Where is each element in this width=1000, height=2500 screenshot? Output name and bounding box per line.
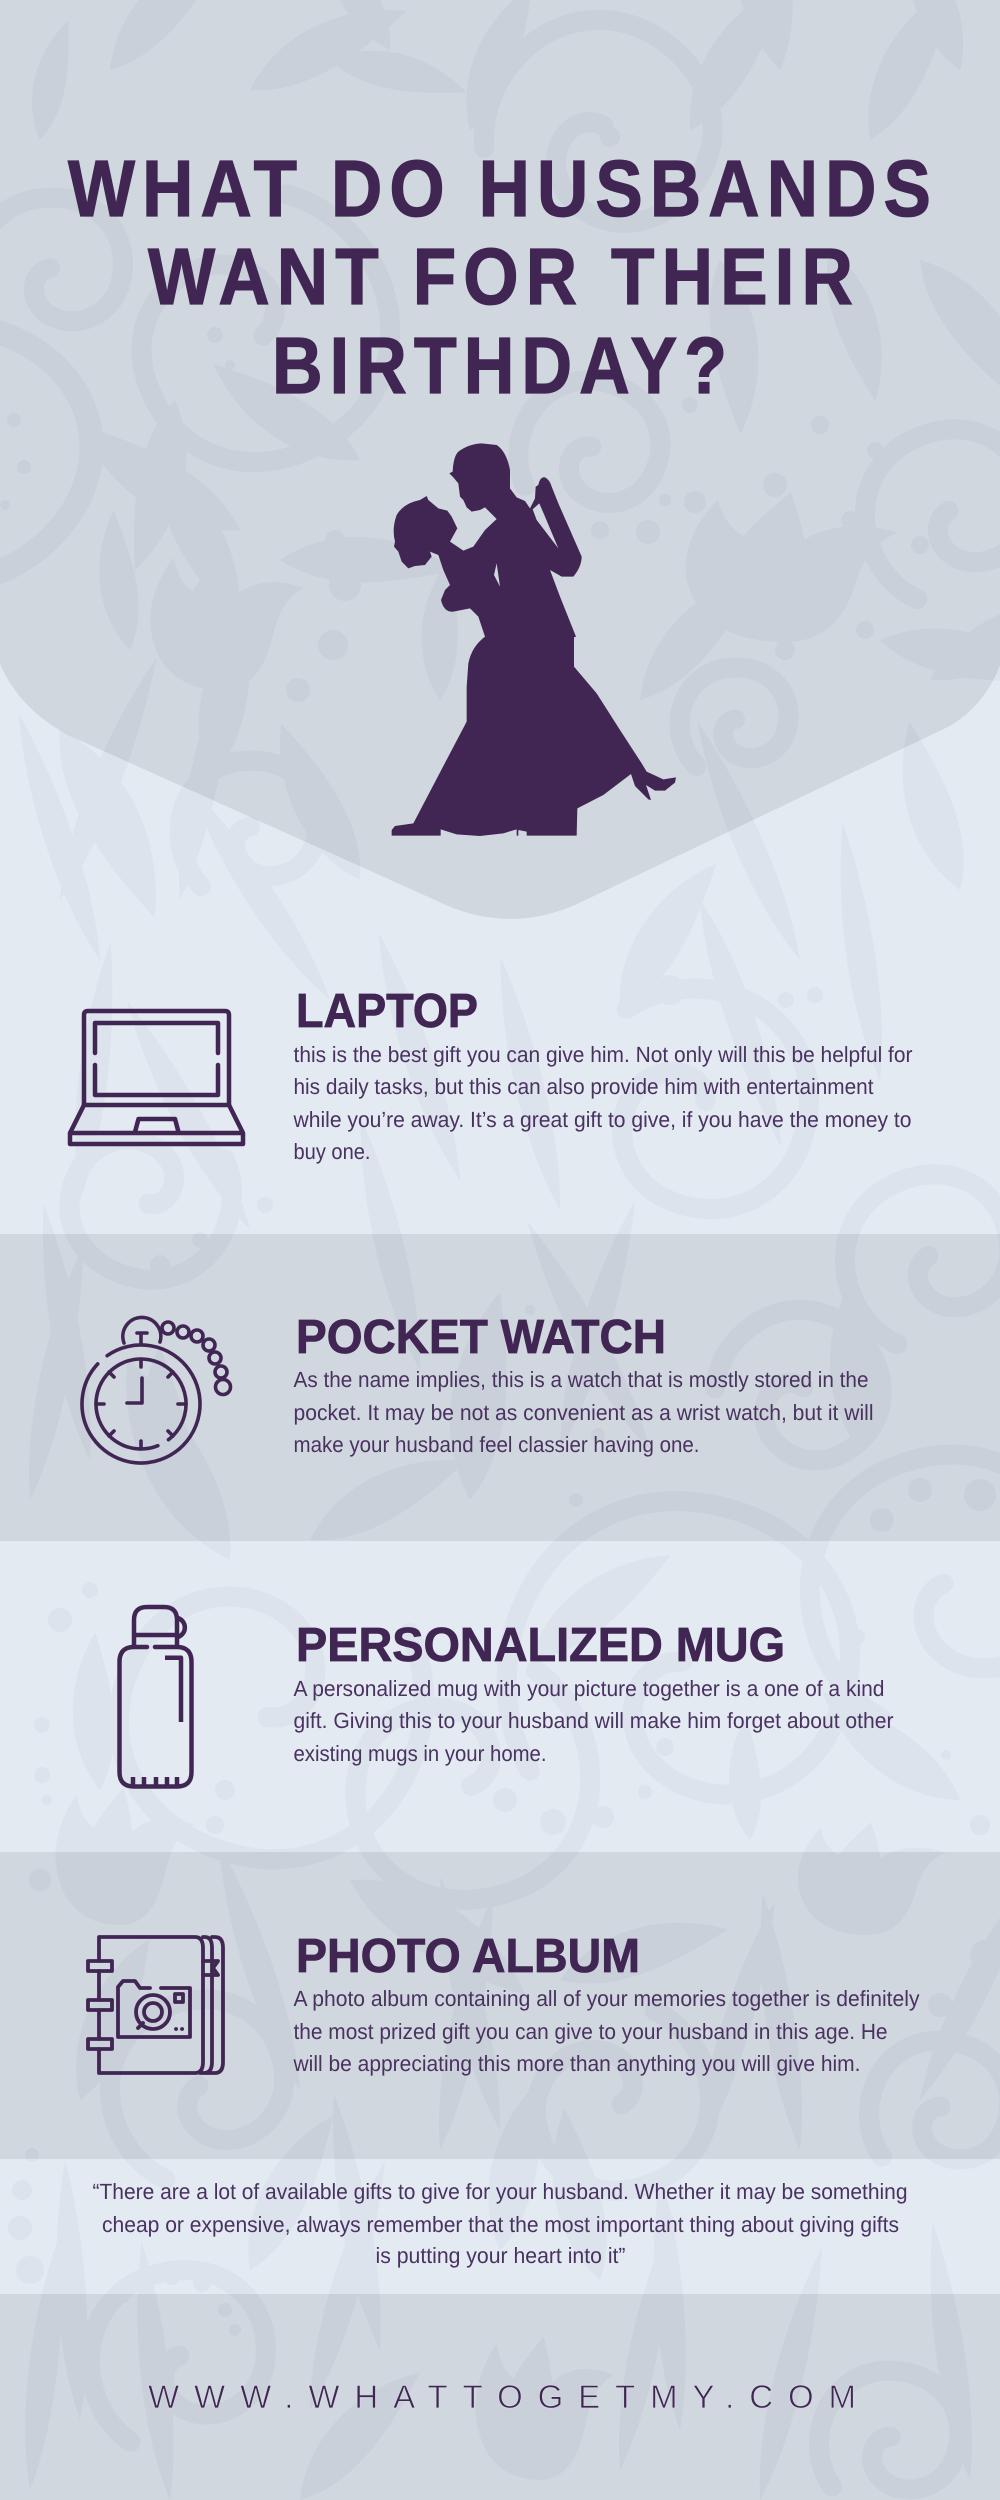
text block: make your husband feel classier having one. (294, 1432, 700, 1457)
icon: pocket watch (59, 1317, 230, 1486)
panel: footer background (0, 2294, 1000, 2500)
text block (293, 1042, 912, 1164)
title: WANT FOR THEIR (148, 232, 860, 321)
heading: LAPTOP (296, 985, 478, 1038)
text block: quote (92, 2179, 908, 2268)
panel: pocket watch (0, 1234, 1000, 1541)
heading: POCKET WATCH (296, 1311, 666, 1364)
text block: his daily tasks, but this can also provide him with entertainment (294, 1074, 874, 1099)
text block: will be appreciating this more than anything you will give him. (293, 2051, 860, 2076)
icon: laptop (70, 1011, 243, 1144)
icon: photo album (88, 1937, 223, 2073)
panel: quote (0, 2159, 1000, 2294)
text block: quote: cheap or expensive, always remember that the most important thing about giving gifts (102, 2212, 899, 2237)
panel: personalized mug (0, 1541, 1000, 1852)
text block: pocket. It may be not as convenient as a wrist watch, but it will (294, 1400, 874, 1425)
text block: existing mugs in your home. (294, 1741, 546, 1766)
icon: dancing couple silhouette (392, 443, 676, 836)
icon: bottle mug (120, 1607, 192, 1786)
text block (294, 1676, 894, 1766)
text block: quote: is putting your heart into it” (376, 2243, 626, 2268)
footer url: WWW.WHATTOGETMY.COM (148, 2378, 856, 2415)
text block: the most prized gift you can give to your husband in this age. He (294, 2019, 888, 2044)
text block: A photo album containing all of your memories together is definitely (294, 1986, 920, 2011)
text block: As the name implies, this is a watch that is mostly stored in the (294, 1367, 868, 1392)
title (68, 144, 938, 410)
text block: gift. Giving this to your husband will make him forget about other (294, 1708, 894, 1733)
text block (294, 1367, 874, 1457)
panel: photo album (0, 1852, 1000, 2159)
text block: while you’re away. It’s a great gift to give, if you have the money to (293, 1107, 912, 1132)
text block: buy one. (294, 1139, 370, 1164)
text block (293, 1986, 920, 2076)
text block: A personalized mug with your picture together is a one of a kind (294, 1676, 884, 1701)
panel: laptop (0, 920, 1000, 1234)
title: BIRTHDAY? (272, 321, 734, 410)
heading: PERSONALIZED MUG (296, 1619, 785, 1672)
text block: quote: “There are a lot of available gifts to give for your husband. Whether it may be something (92, 2179, 908, 2204)
text block: this is the best gift you can give him. Not only will this be helpful for (294, 1042, 912, 1067)
panel: header background (0, 0, 1000, 919)
heading: PHOTO ALBUM (296, 1930, 640, 1983)
